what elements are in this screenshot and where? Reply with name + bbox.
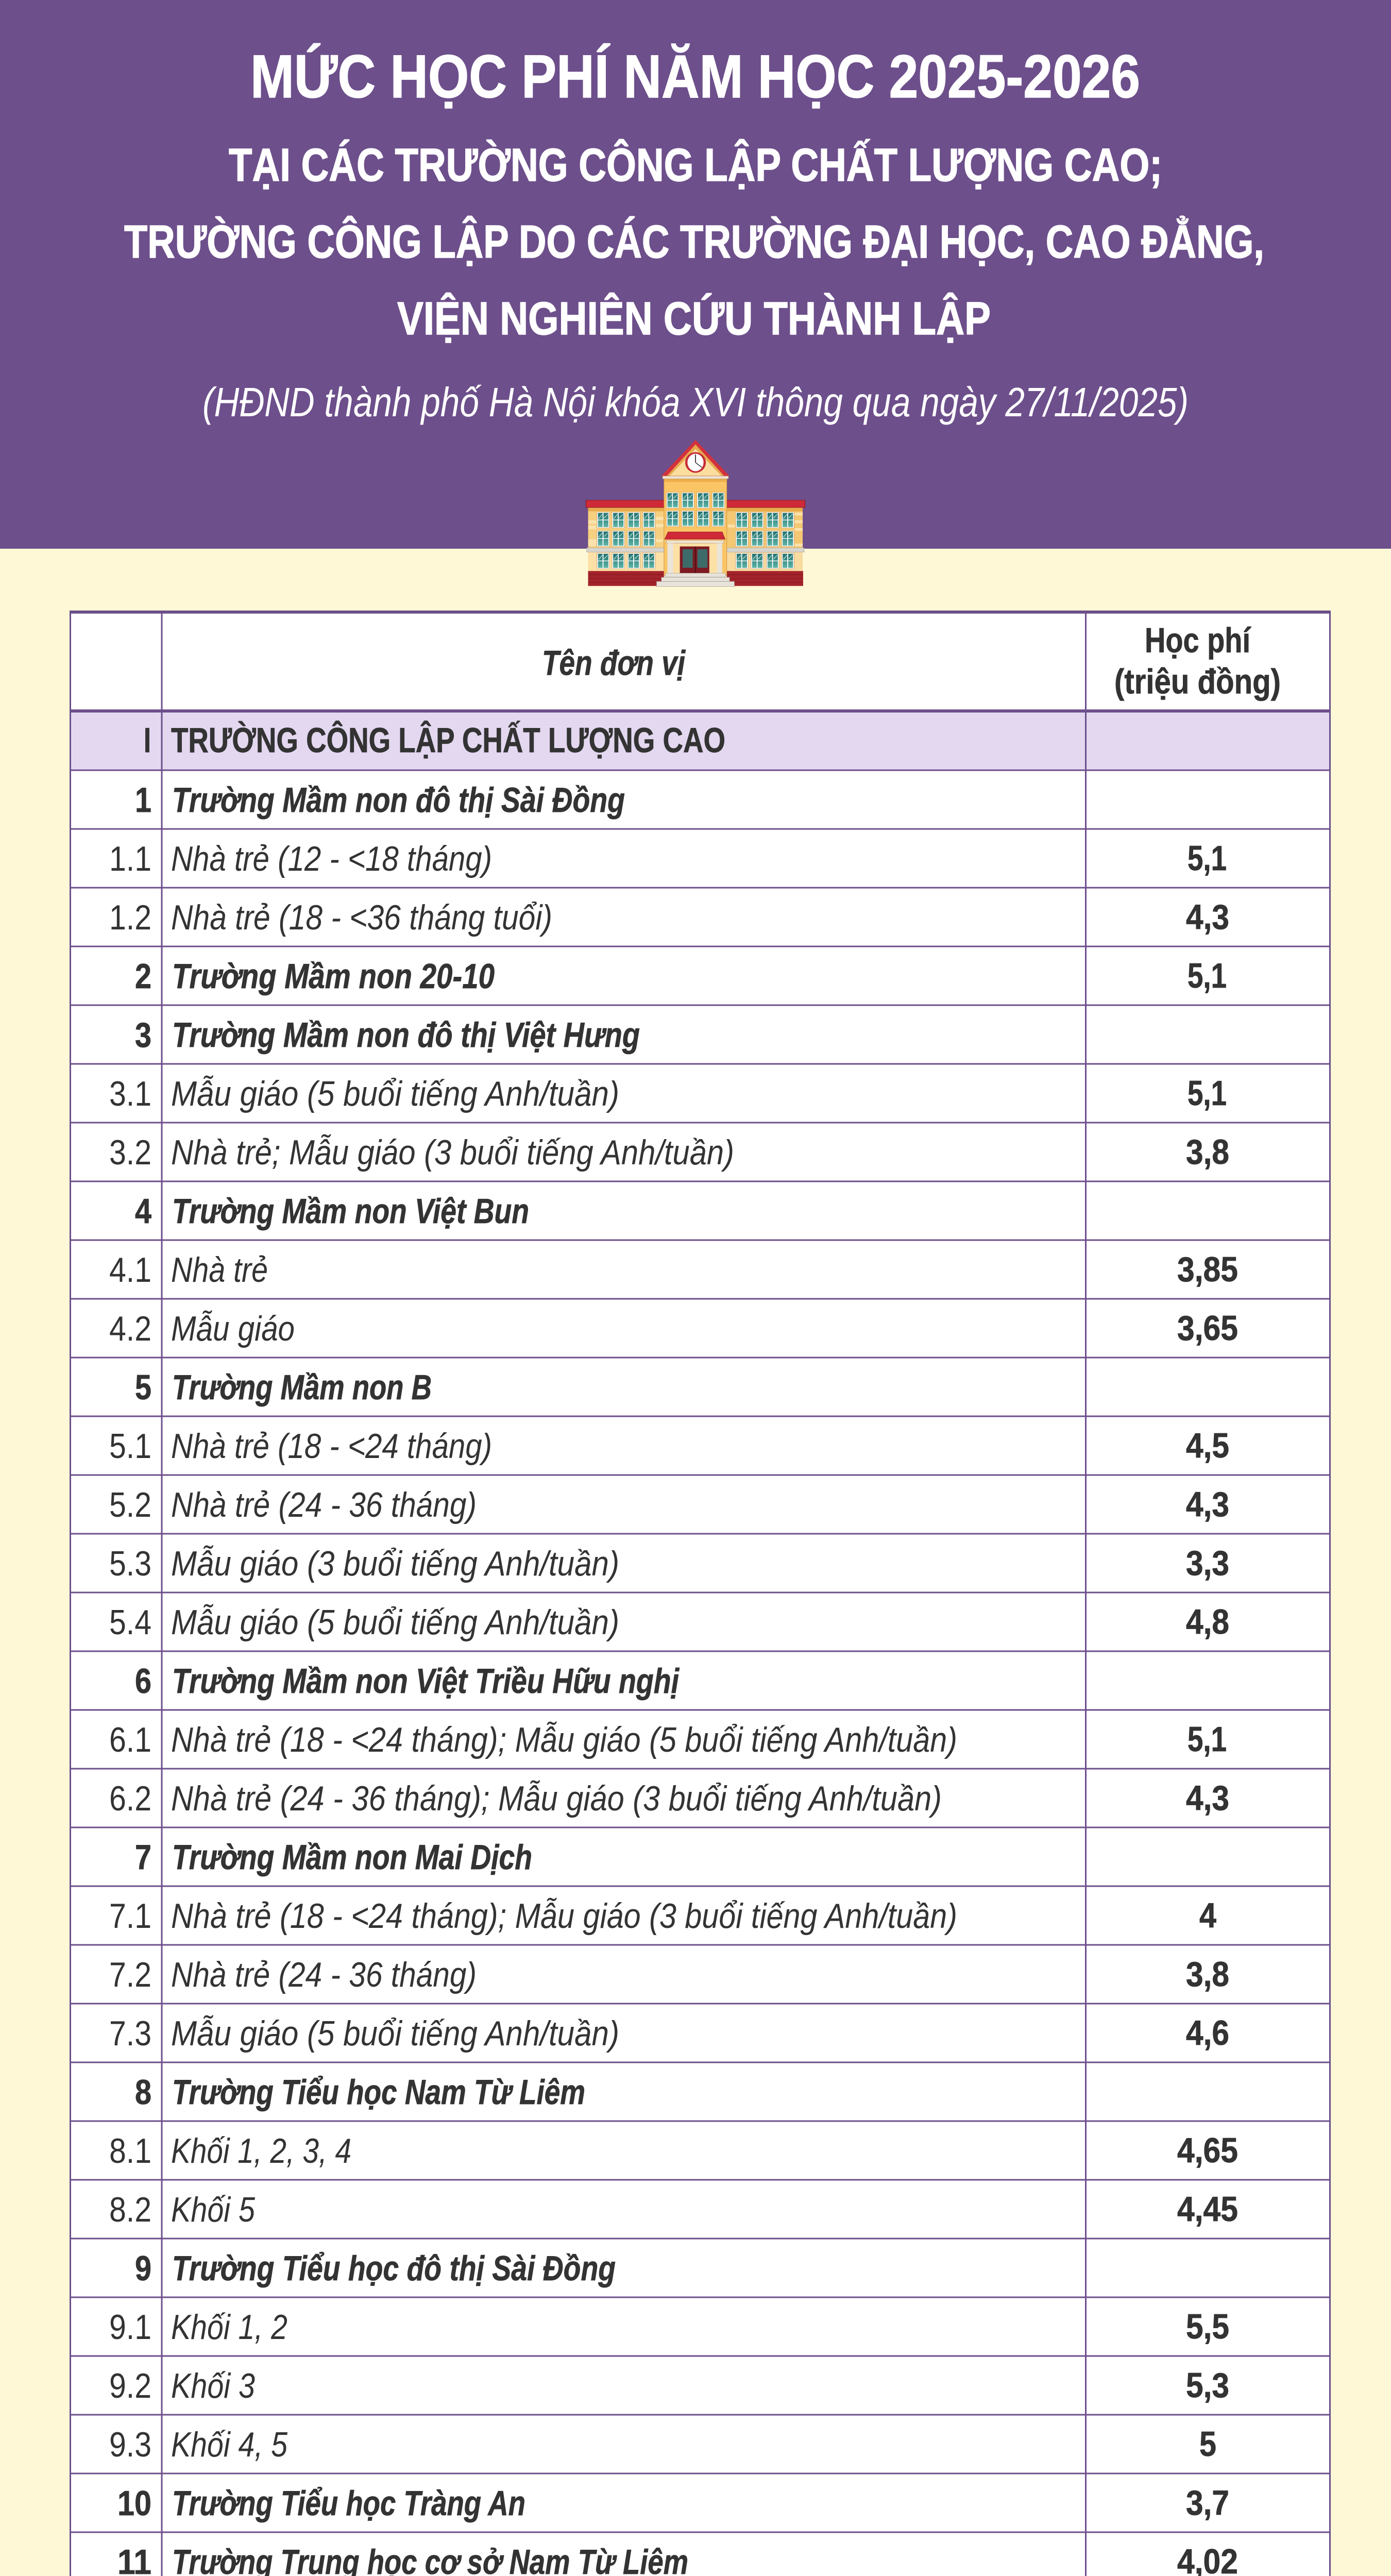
row 2	[135, 956, 1227, 996]
row 3.1: 3.1	[109, 1074, 151, 1113]
row 3.2: Nhà trẻ; Mẫu giáo (3 buổi tiếng Anh/tuần)	[171, 1133, 734, 1172]
row 7.3	[109, 2013, 1229, 2053]
row 1.2: Nhà trẻ (18 - <36 tháng tuổi)	[171, 898, 552, 937]
row 2: Trường Mầm non 20-10	[172, 957, 495, 996]
title block	[124, 43, 1264, 345]
row 4: Trường Mầm non Việt Bun	[172, 1192, 529, 1231]
row 5.4: 5.4	[109, 1603, 151, 1642]
row 10: 3,7	[1186, 2483, 1229, 2522]
row 7.3: Mẫu giáo (5 buổi tiếng Anh/tuần)	[171, 2014, 619, 2053]
row 4: 4	[135, 1192, 151, 1231]
row 2: 2	[135, 957, 151, 996]
row 9.2: Khối 3	[171, 2366, 255, 2405]
row 1.1: 1.1	[109, 839, 151, 878]
row 9.2: 9.2	[109, 2366, 151, 2405]
row 5.2	[109, 1485, 1229, 1524]
row 8.2	[109, 2190, 1238, 2229]
row 1: Trường Mầm non đô thị Sài Đồng	[172, 781, 625, 820]
row 7.1: 7.1	[109, 1896, 151, 1936]
title block: TẠI CÁC TRƯỜNG CÔNG LẬP CHẤT LƯỢNG CAO;	[229, 139, 1162, 191]
subtitle: (HĐND thành phố Hà Nội khóa XVI thông qua ngày 27/11/2025)	[202, 379, 1189, 425]
row 7: Trường Mầm non Mai Dịch	[172, 1838, 532, 1877]
row 1.2: 1.2	[109, 898, 151, 937]
table header: tuition: Học phí	[1145, 621, 1251, 660]
table header: unit name: Tên đơn vị	[542, 643, 686, 683]
row 7.1: 4	[1199, 1896, 1216, 1935]
row 9.1: Khối 1, 2	[171, 2308, 287, 2347]
row 7.3: 4,6	[1186, 2013, 1229, 2053]
row 8.2: 8.2	[109, 2190, 151, 2229]
row 3.2: 3.2	[109, 1133, 151, 1172]
row 9: Trường Tiểu học đô thị Sài Đồng	[172, 2249, 616, 2288]
section I: I	[144, 721, 151, 760]
row 5.2: 4,3	[1186, 1485, 1229, 1524]
row 6.2: Nhà trẻ (24 - 36 tháng); Mẫu giáo (3 buổi tiếng Anh/tuần)	[171, 1779, 942, 1818]
row 4.2	[109, 1309, 1238, 1348]
row 2: 5,1	[1188, 956, 1227, 995]
row 3.1: 5,1	[1188, 1074, 1227, 1113]
row 5.1	[109, 1426, 1229, 1466]
row 9.1: 9.1	[109, 2308, 151, 2347]
row 5.4: Mẫu giáo (5 buổi tiếng Anh/tuần)	[171, 1603, 619, 1642]
row 1.2	[109, 897, 1229, 937]
row 6.2: 6.2	[109, 1779, 151, 1818]
row 4.2: 4.2	[109, 1309, 151, 1348]
section I: TRƯỜNG CÔNG LẬP CHẤT LƯỢNG CAO	[171, 720, 725, 760]
row 5.3: Mẫu giáo (3 buổi tiếng Anh/tuần)	[171, 1544, 619, 1583]
row 10	[117, 2483, 1229, 2523]
row 6.2: 4,3	[1186, 1778, 1229, 1818]
row 1.1	[109, 839, 1227, 878]
row 9.2: 5,3	[1186, 2366, 1229, 2405]
row 4.1: 4.1	[109, 1250, 151, 1290]
title block: MỨC HỌC PHÍ NĂM HỌC 2025-2026	[250, 43, 1140, 111]
row 9.3: Khối 4, 5	[171, 2425, 287, 2464]
row 6: 6	[135, 1662, 151, 1701]
row 8.1: 8.1	[109, 2131, 151, 2171]
row 3: Trường Mầm non đô thị Việt Hưng	[172, 1015, 640, 1055]
row 7.3: 7.3	[109, 2014, 151, 2053]
row 7.2: 7.2	[109, 1955, 151, 1994]
row 3: 3	[135, 1015, 151, 1055]
row 7.2: 3,8	[1186, 1955, 1229, 1994]
row 5.3: 3,3	[1186, 1544, 1229, 1583]
row 8.1: Khối 1, 2, 3, 4	[171, 2131, 351, 2171]
header band	[0, 0, 1391, 549]
row 8: 8	[135, 2073, 151, 2112]
row 10: Trường Tiểu học Tràng An	[172, 2484, 525, 2523]
row 9.1: 5,5	[1186, 2307, 1229, 2346]
row 4.2: 3,65	[1177, 1309, 1238, 1348]
row 9.3	[109, 2425, 1216, 2464]
row 4.1	[109, 1250, 1238, 1290]
row 4.1: 3,85	[1177, 1250, 1238, 1289]
row 9.2	[109, 2366, 1229, 2405]
row 1: 1	[135, 781, 151, 820]
row 8.1: 4,65	[1177, 2131, 1238, 2170]
row 5: Trường Mầm non B	[172, 1368, 432, 1407]
row 5.4	[109, 1602, 1229, 1642]
row 5.4: 4,8	[1186, 1602, 1229, 1641]
row 4.1: Nhà trẻ	[171, 1250, 268, 1290]
row 8: Trường Tiểu học Nam Từ Liêm	[172, 2073, 585, 2112]
row 3.2: 3,8	[1186, 1132, 1229, 1172]
row 5.3: 5.3	[109, 1544, 151, 1583]
row 3.1	[109, 1074, 1227, 1113]
row 5.1: 5.1	[109, 1427, 151, 1466]
row 4.2: Mẫu giáo	[171, 1309, 295, 1348]
row 11	[117, 2542, 1238, 2576]
row 8.1	[109, 2131, 1238, 2171]
row 5.3	[109, 1544, 1229, 1583]
table header: tuition	[1114, 621, 1281, 701]
row 9.3: 5	[1199, 2425, 1216, 2464]
row 5.2: 5.2	[109, 1485, 151, 1524]
row 9: 9	[135, 2249, 151, 2288]
row 7.1: Nhà trẻ (18 - <24 tháng); Mẫu giáo (3 buổi tiếng Anh/tuần)	[171, 1896, 957, 1936]
row 1.2: 4,3	[1186, 897, 1229, 937]
row 9.1	[109, 2307, 1229, 2347]
row 7.2: Nhà trẻ (24 - 36 tháng)	[171, 1955, 477, 1994]
row 5.1: 4,5	[1186, 1426, 1229, 1465]
row 5: 5	[135, 1368, 151, 1407]
row 8.2: 4,45	[1177, 2190, 1238, 2229]
row 1.1: 5,1	[1188, 839, 1227, 878]
row 1.1: Nhà trẻ (12 - <18 tháng)	[171, 839, 492, 878]
row 8.2: Khối 5	[171, 2190, 255, 2229]
row 7.2	[109, 1955, 1229, 1994]
table grid	[70, 611, 1331, 2576]
row 9.3: 9.3	[109, 2425, 151, 2464]
row 6.1: Nhà trẻ (18 - <24 tháng); Mẫu giáo (5 buổi tiếng Anh/tuần)	[171, 1720, 957, 1759]
title block: VIỆN NGHIÊN CỨU THÀNH LẬP	[397, 292, 991, 345]
row 6.1: 5,1	[1188, 1720, 1227, 1759]
row 7: 7	[135, 1838, 151, 1877]
icon: school building	[586, 440, 805, 587]
row 5.2: Nhà trẻ (24 - 36 tháng)	[171, 1485, 477, 1524]
row 3.1: Mẫu giáo (5 buổi tiếng Anh/tuần)	[171, 1074, 619, 1113]
table header: tuition: (triệu đồng)	[1114, 662, 1281, 701]
row 6.1: 6.1	[109, 1720, 151, 1759]
row 6: Trường Mầm non Việt Triều Hữu nghị	[172, 1662, 680, 1701]
row 10: 10	[117, 2484, 151, 2523]
table	[70, 611, 1331, 2576]
row 3.2	[109, 1132, 1229, 1172]
row 5.1: Nhà trẻ (18 - <24 tháng)	[171, 1427, 492, 1466]
